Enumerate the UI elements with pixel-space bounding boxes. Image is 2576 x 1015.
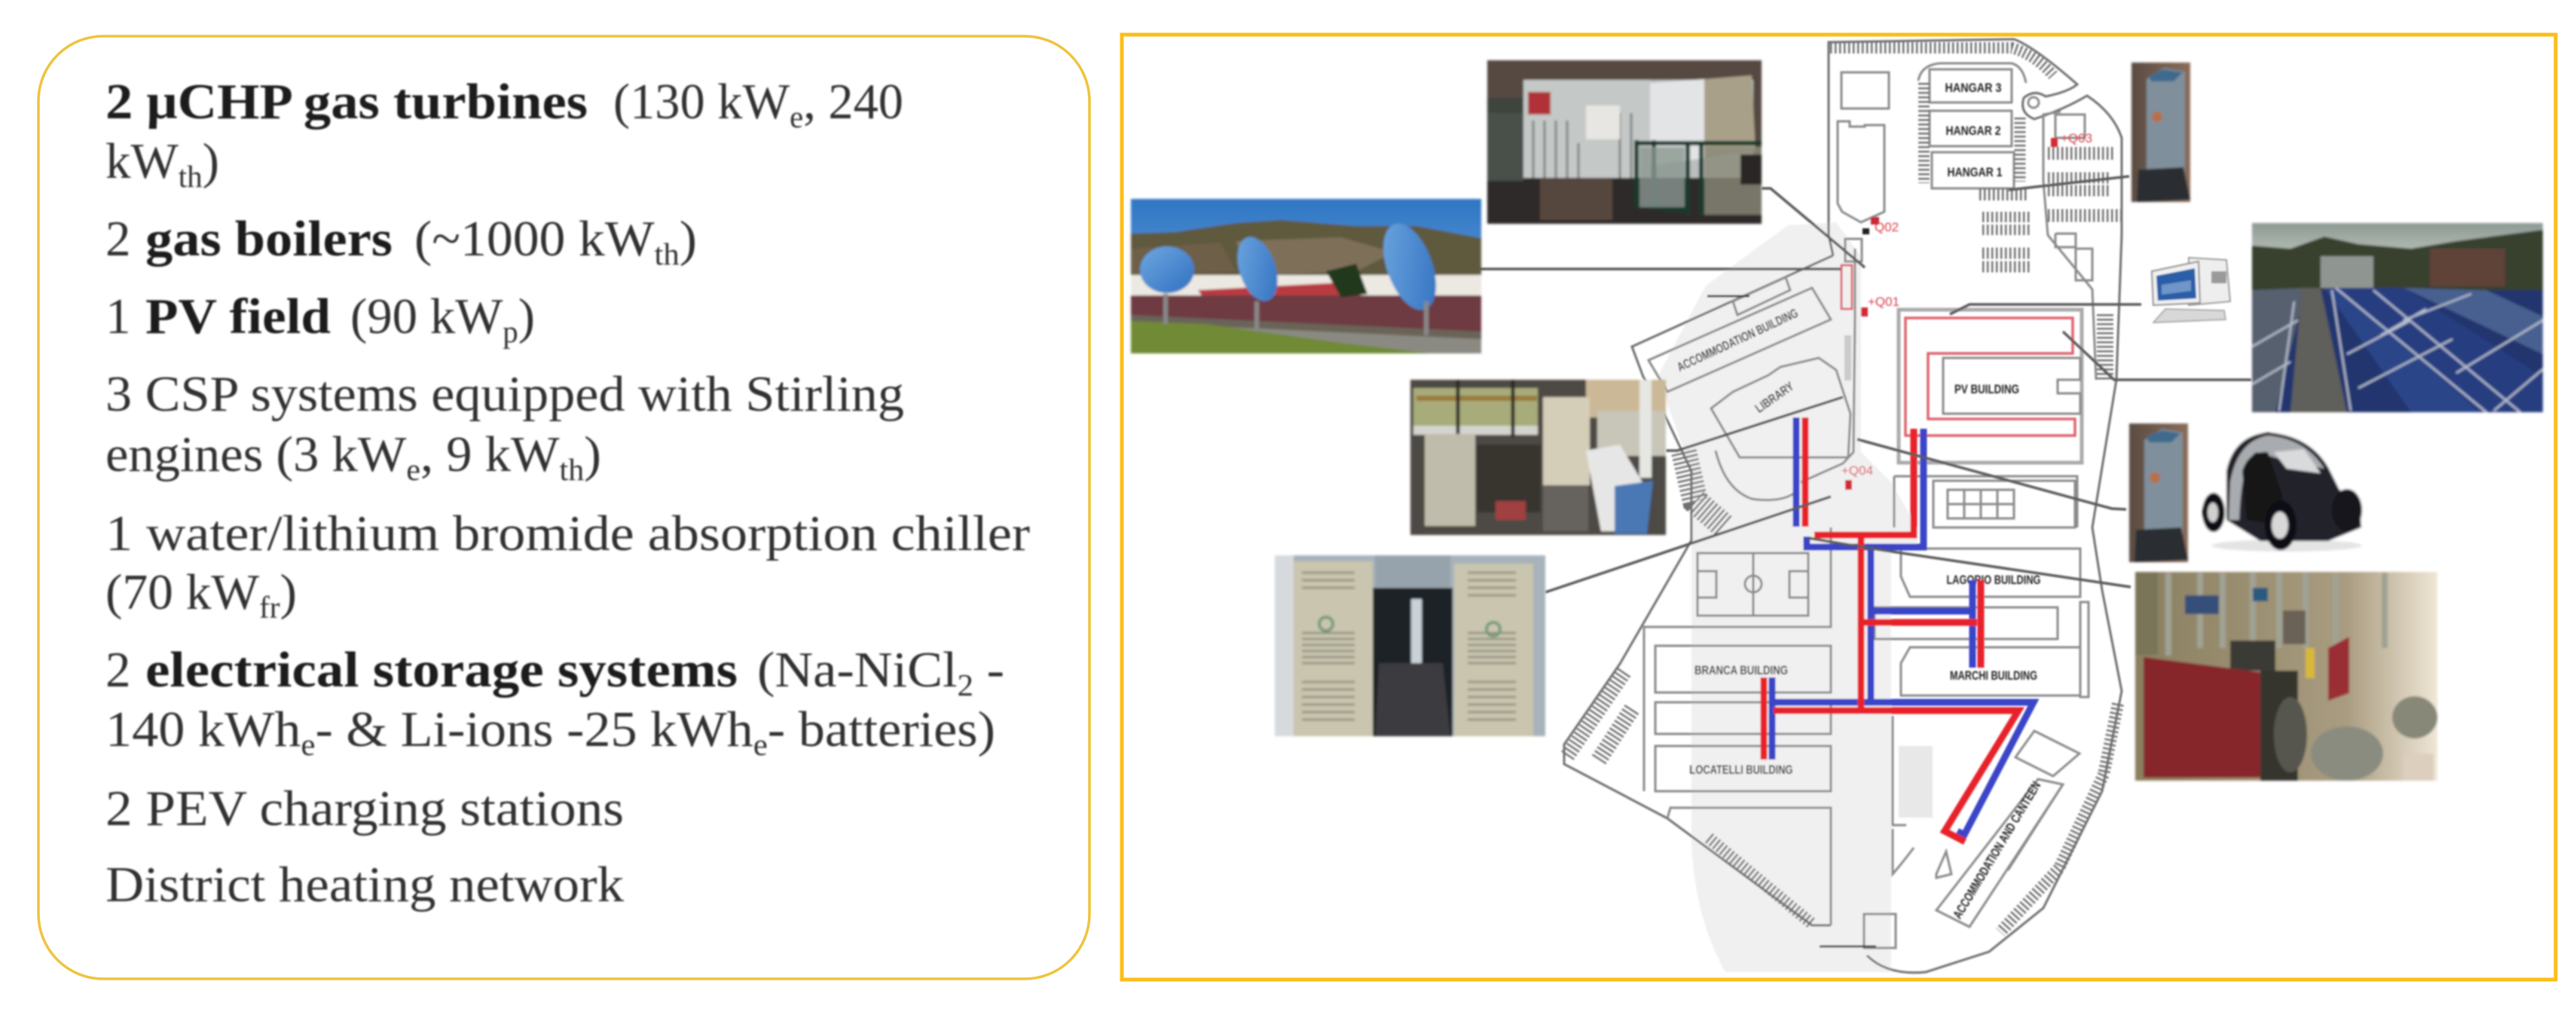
panel: equipment list	[38, 36, 1089, 979]
equipment list text	[105, 74, 1030, 913]
item: CSP systems: e	[406, 452, 420, 487]
item: electrical storage: electrical storage systems	[145, 642, 738, 698]
item: CSP systems: , 9 kW	[420, 426, 560, 482]
item: gas boilers: gas boilers	[145, 211, 393, 267]
photo: gas boilers	[2135, 572, 2437, 781]
CSP and marker outlines: +Q01	[1868, 295, 1899, 309]
item: absorption chiller	[105, 506, 1030, 625]
panel: site map frame	[1122, 35, 2556, 980]
district heating network: red pipes	[1764, 417, 2018, 842]
item: electrical storage: -	[973, 642, 1004, 698]
item: gas turbines	[105, 74, 903, 194]
item: absorption chiller: 1 water/lithium bromide absorption chiller	[105, 506, 1030, 561]
photo: CSP dishes	[1131, 199, 1481, 353]
dish 3	[1373, 216, 1447, 317]
photo: electric car	[2202, 433, 2367, 552]
item: gas turbines: , 240	[803, 74, 903, 130]
item: gas boilers: (~1000 kW	[414, 211, 645, 267]
item: CSP systems: th	[560, 452, 584, 487]
CSP and marker outlines	[1841, 131, 2092, 490]
hangars: HANGAR 2	[1945, 124, 2001, 138]
accommodation building: ACCOMMODATION BUILDING	[1675, 306, 1801, 375]
callout lines	[1466, 176, 2251, 592]
gray campus zone	[1658, 222, 1917, 972]
Branca, Locatelli and middle buildings: BRANCA BUILDING	[1694, 663, 1788, 677]
item: electrical storage	[105, 642, 1004, 762]
item: electrical storage: e	[753, 727, 768, 762]
hangars: HANGAR 3	[1945, 81, 2001, 95]
item: PV field: p	[503, 314, 518, 349]
item: PV field: PV field	[145, 289, 331, 344]
small entry arrow	[1707, 295, 1749, 297]
item: electrical storage: (Na-NiCl	[757, 642, 948, 698]
CSP and marker outlines: +Q03	[2061, 131, 2092, 145]
item: PV field	[105, 289, 535, 349]
photo: charging station south	[2129, 423, 2188, 562]
dish 2	[1230, 232, 1285, 306]
CSP and marker outlines: Q02	[1875, 220, 1899, 234]
item: gas boilers: 2	[105, 211, 131, 267]
accommodation and canteen: ACCOMMODATION AND CANTEEN	[1950, 779, 2043, 922]
parking strips	[1566, 48, 2122, 932]
Lagorio and Marchi buildings	[1875, 549, 2089, 697]
item: gas turbines: 2 μCHP gas turbines	[105, 74, 588, 130]
photo: battery cabinets	[1275, 555, 1545, 736]
item: gas turbines: )	[203, 133, 219, 189]
cabinet left	[1294, 561, 1373, 736]
sports field and tennis courts	[1644, 476, 2077, 791]
photo: charging station north	[2131, 63, 2190, 202]
photo: control room and chiller	[1410, 380, 1666, 535]
library: LIBRARY	[1752, 379, 1797, 416]
item: electrical storage: - & Li-ions -25 kWh	[315, 702, 753, 757]
CSP and marker outlines: +Q04	[1841, 463, 1873, 478]
item: district heating: District heating network	[105, 857, 625, 913]
item: PV field: 1	[105, 289, 131, 344]
accommodation building	[1649, 277, 1831, 392]
item: electrical storage: 2	[105, 642, 131, 698]
library	[1711, 358, 1850, 457]
item: CSP systems: 3 CSP systems equipped with Stirling	[105, 366, 904, 422]
item: PEV charging: 2 PEV charging stations	[105, 781, 624, 836]
item: gas turbines: kW	[105, 133, 179, 189]
item: gas turbines: th	[179, 159, 203, 194]
item: CSP systems	[105, 366, 904, 487]
district heating network: blue pipes	[1772, 417, 2034, 835]
PV building: PV BUILDING	[1954, 382, 2019, 396]
planter	[1540, 179, 1612, 220]
item: gas turbines: e	[790, 99, 803, 134]
item: electrical storage: - batteries)	[768, 702, 995, 757]
item: electrical storage: 140 kWh	[105, 702, 292, 757]
north small buildings	[1838, 72, 2092, 280]
item: PV field: (90 kW	[350, 289, 503, 344]
item: absorption chiller: )	[280, 564, 297, 620]
site boundary	[1829, 39, 2122, 973]
item: gas boilers: th	[655, 237, 680, 271]
Lagorio and Marchi buildings: MARCHI BUILDING	[1950, 668, 2037, 683]
item: gas boilers: )	[680, 211, 697, 267]
item: CSP systems: )	[584, 426, 601, 482]
site map	[1466, 39, 2251, 973]
Branca, Locatelli and middle buildings: LOCATELLI BUILDING	[1689, 763, 1793, 777]
item: absorption chiller: fr	[259, 590, 280, 625]
item: absorption chiller: (70 kW	[105, 564, 258, 620]
hangars	[1918, 63, 2026, 188]
dish 1	[1140, 246, 1194, 293]
red boiler	[2144, 657, 2260, 778]
item: CSP systems: engines (3 kW	[105, 426, 400, 482]
item: electrical storage: 2	[958, 668, 973, 702]
green gates	[1636, 140, 1762, 215]
item: gas boilers	[105, 211, 697, 271]
Lagorio and Marchi buildings: LAGORIO BUILDING	[1947, 573, 2040, 587]
Branca, Locatelli and middle buildings	[1655, 646, 1831, 925]
item: electrical storage: e	[301, 727, 315, 762]
accommodation and canteen	[1820, 716, 2079, 948]
item: PV field: )	[518, 289, 535, 344]
hangars: HANGAR 1	[1947, 165, 2003, 179]
photo: gas turbine container	[1487, 60, 1762, 224]
icon: computer	[2152, 258, 2230, 323]
photo: PV field	[2252, 223, 2543, 412]
PV building	[1899, 310, 2082, 463]
cabinet right	[1454, 564, 1533, 736]
item: gas turbines: (130 kW	[613, 74, 791, 130]
